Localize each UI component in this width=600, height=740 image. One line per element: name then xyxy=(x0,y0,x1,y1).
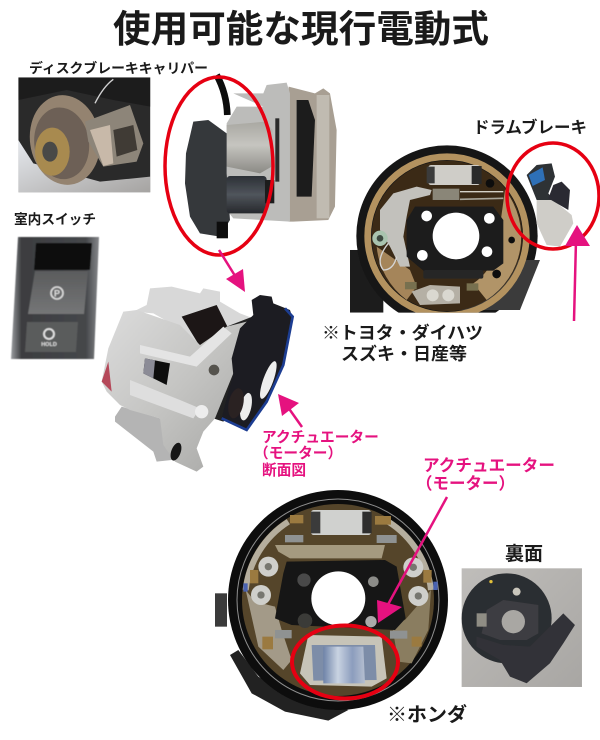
photo: interior parking brake switch xyxy=(11,237,99,359)
silver anchor bolts xyxy=(251,557,428,606)
callout: red ellipse on caliper actuator xyxy=(165,77,273,255)
dark gap behind actuator xyxy=(213,315,257,422)
lower bracket xyxy=(230,650,348,721)
label: drum brake: ドラムブレーキ xyxy=(473,118,587,137)
upper brake shoe arcs xyxy=(246,522,288,590)
lower springs xyxy=(275,630,292,638)
spring xyxy=(433,189,459,200)
right brake shoe xyxy=(473,190,521,300)
label: makers of drum type xyxy=(322,323,483,364)
label: disc brake caliper: ディスクブレーキキャリパー xyxy=(29,60,208,76)
label: cutaway actuator: 断面図 xyxy=(262,462,306,479)
photo: drum brake xyxy=(350,145,540,327)
gears xyxy=(257,359,280,400)
bolt bosses xyxy=(209,365,219,375)
top wheel cylinder xyxy=(311,510,371,535)
label: cutaway actuator: （モーター） xyxy=(254,445,342,462)
label: makers of drum type: スズキ・日産等 xyxy=(341,344,467,364)
actuator body xyxy=(300,635,387,687)
blue cutaway edge xyxy=(222,308,293,430)
arrow: to Honda actuator xyxy=(377,497,447,623)
blue marks xyxy=(243,583,248,592)
label: back side: 裏面 xyxy=(505,543,543,565)
actuator housing xyxy=(222,295,293,430)
wheel cylinder xyxy=(428,165,480,185)
adjuster and holes xyxy=(372,231,388,246)
label: cutaway actuator xyxy=(254,429,379,479)
lower bar xyxy=(423,270,483,279)
actuator housing xyxy=(185,120,230,237)
center plate xyxy=(407,207,503,271)
icon: HOLD button symbol: HOLD xyxy=(41,342,57,348)
silver cylinder xyxy=(227,122,273,173)
label: drum actuator: アクチュエーター xyxy=(423,456,555,475)
arrow: to cutaway actuator xyxy=(278,394,302,427)
left lower shoe xyxy=(377,247,417,300)
lower block xyxy=(115,407,173,462)
backing rim xyxy=(228,490,448,710)
label: drum actuator: （モーター） xyxy=(416,474,515,493)
label: cutaway actuator: アクチュエーター xyxy=(262,429,379,446)
icon: P button symbol: P xyxy=(54,288,60,298)
lower brake shoes xyxy=(246,590,292,670)
silver bridge xyxy=(227,83,290,222)
photo: top disc caliper with actuator xyxy=(185,75,337,238)
arrow: down to cutaway caliper xyxy=(219,250,245,292)
caliper window xyxy=(143,358,170,385)
label: interior switch: 室内スイッチ xyxy=(14,211,96,227)
brown caliper rear xyxy=(289,87,337,222)
arrow: up to drum actuator xyxy=(565,225,590,321)
photo: Honda drum brake xyxy=(215,490,448,721)
callout: red ellipse on Honda actuator xyxy=(292,626,398,698)
backing plate xyxy=(350,250,383,313)
label: makers of drum type: ※トヨタ・ダイハツ xyxy=(322,323,483,343)
photo: cutaway caliper xyxy=(102,287,293,472)
label: Honda: ※ホンダ xyxy=(387,703,467,726)
label: drum actuator xyxy=(416,456,555,493)
callout: red ellipse on drum actuator xyxy=(507,143,599,249)
lower anchor xyxy=(412,285,460,305)
lower springs xyxy=(405,282,417,289)
photo: drum-mounted actuator xyxy=(527,163,573,247)
upper block xyxy=(133,287,253,347)
cable xyxy=(217,75,227,115)
photo: back of Honda drum xyxy=(462,568,582,687)
hub hole xyxy=(311,571,365,625)
shoe lever xyxy=(380,187,432,267)
springs and bar xyxy=(285,535,303,542)
caliper body xyxy=(102,310,248,472)
motor xyxy=(227,176,267,213)
hub hole and bolts xyxy=(417,211,495,261)
center plate xyxy=(275,560,406,630)
title: 使用可能な現行電動式 xyxy=(113,8,489,50)
plate studs xyxy=(297,573,311,587)
bronze blocks xyxy=(250,515,432,649)
photo: disc brake on car xyxy=(18,77,150,192)
